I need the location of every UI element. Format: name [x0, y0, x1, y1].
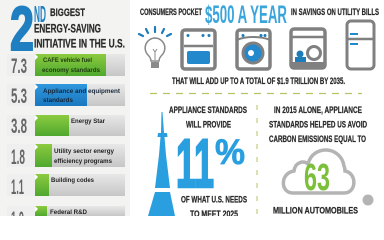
bar row: CAFE: economy standards [42, 67, 100, 74]
bar row: building codes: Building codes [51, 177, 94, 184]
text: of what US needs: OF WHAT U.S. NEEDS [181, 194, 247, 204]
icon: cloud [283, 150, 354, 193]
bar row: utility sector: 1.8 [11, 146, 25, 169]
stat: 63: 63 [304, 157, 330, 199]
text: appliance standards will provide [169, 105, 247, 130]
bar row: building codes [7, 174, 125, 199]
heading: second biggest initiative [10, 0, 125, 64]
bar row: utility sector [7, 144, 125, 169]
bar row: federal R&D [7, 206, 125, 231]
bar row: building codes: 1.1 [11, 176, 24, 199]
heading: second biggest initiative: BIGGEST [50, 7, 85, 19]
icon: oven [182, 30, 215, 69]
heading: second biggest initiative: ENERGY-SAVING [34, 22, 101, 36]
decoration: grey dot [362, 194, 374, 206]
bar row: appliance: standards [43, 97, 73, 104]
bar row: appliance: Appliance and equipment [43, 88, 121, 95]
text: in 2015 alone [269, 105, 367, 144]
bar row: CAFE [7, 54, 125, 78]
bar row: Energy Star [7, 115, 125, 138]
bar row: Energy Star: 3.8 [11, 115, 27, 138]
icon: dishwasher [291, 29, 325, 69]
icon: tower [148, 112, 175, 216]
text: appliance standards will provide: WILL PROVIDE [186, 120, 231, 130]
icon: refrigerator [347, 21, 374, 69]
text: $500 a year: $500 A YEAR [205, 1, 287, 29]
icon: light bulb [139, 27, 171, 68]
heading: second biggest initiative: INITIATIVE IN THE U.S. [34, 36, 125, 50]
stat: 11 percent: % [215, 133, 245, 172]
stat: 11 percent: 11 [176, 125, 214, 202]
text: appliance standards will provide: APPLIANCE STANDARDS [169, 105, 247, 115]
text: of what US needs [181, 194, 247, 219]
panel: left background [0, 0, 130, 216]
bar row: utility sector: Utility sector energy [54, 148, 114, 155]
bar row: federal R&D: Federal R&D [50, 209, 87, 216]
bar row: CAFE: CAFE vehicle fuel [43, 57, 92, 64]
bar row: appliance: 5.3 [11, 85, 27, 108]
bar row: Energy Star: Energy Star [71, 118, 105, 125]
text: consumers pocket: CONSUMERS POCKET [140, 7, 202, 17]
icon: washer [237, 30, 270, 69]
heading: second biggest initiative: ND [34, 1, 46, 27]
bar row: appliance [7, 84, 125, 108]
bar row: CAFE: 7.3 [11, 55, 27, 78]
bar row: utility sector: efficiency programs [54, 158, 112, 165]
